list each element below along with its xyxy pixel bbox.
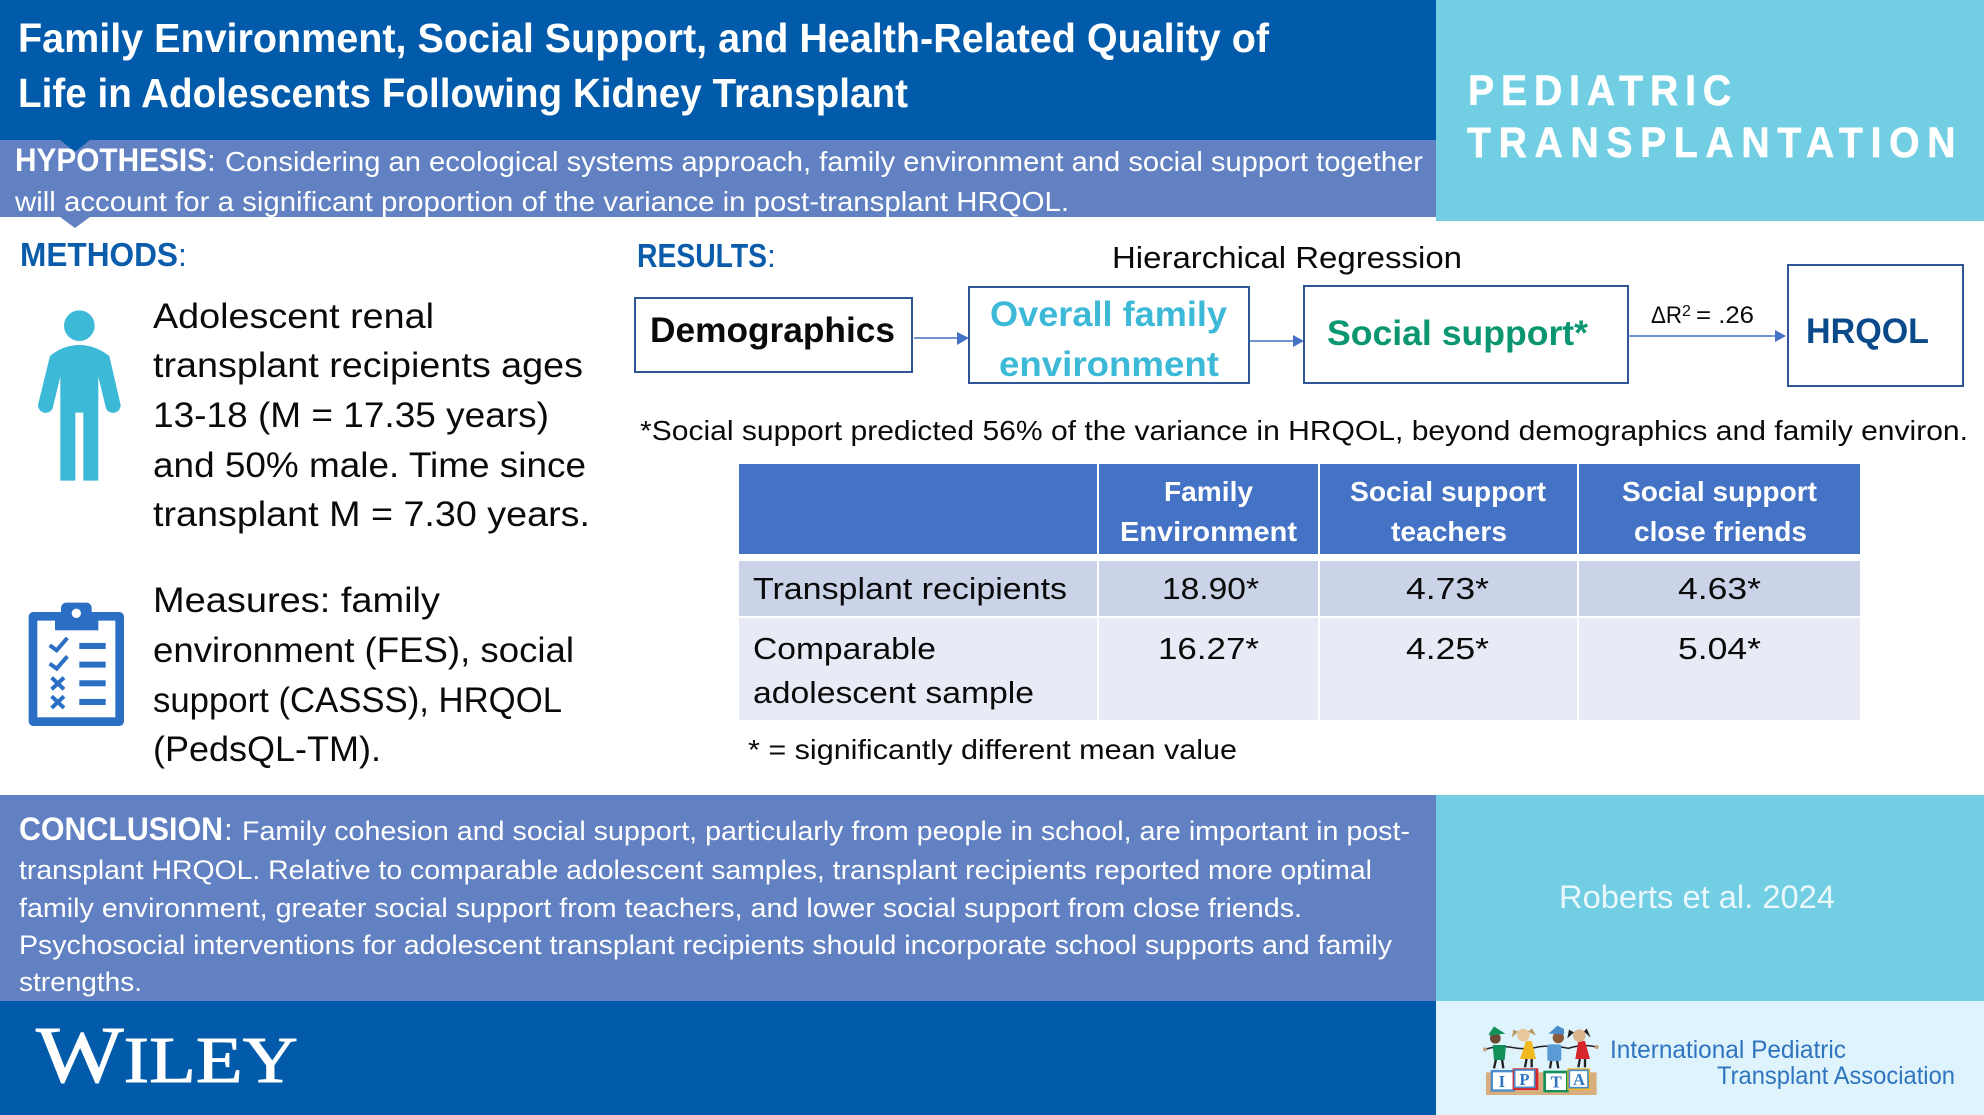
icon: children on alphabet blocks: T [1551, 1073, 1562, 1092]
arrow: social support to HRQOL with delta R squared: = .26 [1696, 302, 1754, 329]
citation panel [1436, 795, 1984, 1001]
methods heading: : [178, 237, 187, 273]
conclusion band: : [224, 812, 233, 847]
box: social support [1304, 286, 1628, 383]
conclusion band: Family cohesion and social support, particularly from people in school, are important in post- [242, 816, 1410, 846]
box: social support: Social support* [1327, 314, 1588, 353]
table row: comparable adolescent sample [753, 631, 1761, 710]
regression diagram heading: Hierarchical Regression [1112, 240, 1462, 275]
publisher footer: Wiley logo: WILEY [36, 1012, 298, 1100]
table header: teachers [1391, 516, 1507, 547]
hypothesis band: will account for a significant proportion of the variance in post-transplant HRQOL. [14, 186, 1069, 217]
hypothesis band: Considering an ecological systems approach, family environment and social support together [225, 146, 1423, 177]
methods: measures text: support (CASSS), HRQOL [153, 681, 562, 720]
journal name panel: TRANSPLANTATION [1467, 118, 1956, 166]
table header: Social support [1622, 476, 1817, 507]
methods: participants text: Adolescent renal [153, 297, 434, 336]
box: HRQOL: HRQOL [1806, 312, 1929, 351]
methods: measures text: environment (FES), social [153, 631, 574, 670]
arrow: family environment to social support [1249, 335, 1304, 347]
title band [0, 0, 1436, 140]
table row: transplant recipients: 4.63* [1678, 571, 1761, 606]
results heading: : [767, 238, 776, 274]
table header: Family [1164, 476, 1253, 507]
methods heading: METHODS [20, 236, 178, 273]
conclusion band: CONCLUSION [19, 811, 223, 847]
table row: transplant recipients [753, 571, 1761, 606]
hypothesis band: : [207, 143, 216, 178]
arrow: demographics to family environment [914, 332, 969, 345]
methods: measures text [153, 581, 574, 769]
icon: children on alphabet blocks: A [1573, 1070, 1585, 1089]
arrow: social support to HRQOL with delta R squared: 2 [1682, 303, 1691, 320]
table row: transplant recipients: 18.90* [1162, 571, 1259, 606]
title band: Life in Adolescents Following Kidney Transplant [18, 70, 908, 116]
arrow: social support to HRQOL with delta R squared [1628, 302, 1786, 342]
table row: comparable adolescent sample: adolescent sample [753, 675, 1034, 710]
table row: comparable adolescent sample: 16.27* [1158, 631, 1259, 666]
conclusion band: transplant HRQOL. Relative to comparable adolescent samples, transplant recipients reported more optimal [19, 855, 1372, 885]
journal name panel [1436, 0, 1984, 221]
box: overall family environment: environment [999, 345, 1219, 384]
results heading: RESULTS [637, 237, 767, 274]
methods: participants text: transplant M = 7.30 years. [153, 495, 590, 534]
icon: children on alphabet blocks: P [1519, 1070, 1530, 1089]
title band: Family Environment, Social Support, and Health-Related Quality of [18, 15, 1269, 61]
arrow: social support to HRQOL with delta R squared: ΔR [1651, 302, 1682, 329]
table row: comparable adolescent sample: 5.04* [1678, 631, 1761, 666]
table row: comparable adolescent sample: 4.25* [1406, 631, 1489, 666]
table header [1120, 476, 1817, 547]
icon: clipboard checklist [29, 603, 124, 726]
table row: transplant recipients: 4.73* [1406, 571, 1489, 606]
IPTA logo footer [1436, 1001, 1984, 1115]
regression note: *Social support predicted 56% of the variance in HRQOL, beyond demographics and family environ. [640, 415, 1968, 446]
organisation name: International Pediatric [1610, 1036, 1846, 1064]
box: overall family environment: Overall family [990, 295, 1228, 334]
table row: transplant recipients: Transplant recipients [753, 571, 1067, 606]
methods: participants text: and 50% male. Time since [153, 446, 586, 485]
table row: comparable adolescent sample: Comparable [753, 631, 936, 666]
methods: measures text: Measures: family [153, 581, 441, 620]
organisation name [1610, 1036, 1955, 1090]
box: demographics: Demographics [650, 311, 895, 350]
organisation name: Transplant Association [1717, 1062, 1955, 1090]
conclusion band: family environment, greater social support from teachers, and lower social support from close friends. [19, 893, 1302, 923]
methods: participants text: 13-18 (M = 17.35 years) [153, 396, 549, 435]
table footnote: * = significantly different mean value [748, 734, 1237, 765]
hypothesis band: HYPOTHESIS [15, 142, 207, 178]
table header: Social support [1350, 476, 1546, 507]
hypothesis band [0, 140, 1436, 228]
box: demographics [635, 298, 912, 372]
icon: person [38, 310, 121, 481]
icon: children on alphabet blocks [1483, 1026, 1599, 1095]
publisher footer: Wiley logo [0, 1001, 1436, 1115]
methods: participants text: transplant recipients ages [153, 346, 583, 385]
conclusion band: strengths. [19, 967, 142, 997]
table header: close friends [1634, 516, 1807, 547]
methods: measures text: (PedsQL-TM). [153, 730, 381, 769]
conclusion band [0, 795, 1436, 1001]
box: HRQOL [1788, 265, 1963, 386]
conclusion band: Psychosocial interventions for adolescent transplant recipients should incorporate school supports and family [19, 930, 1393, 960]
icon: children on alphabet blocks: I [1499, 1072, 1505, 1091]
journal name panel: PEDIATRIC [1468, 66, 1731, 114]
results table [739, 464, 1860, 720]
box: overall family environment [969, 287, 1249, 384]
citation panel: Roberts et al. 2024 [1559, 879, 1835, 915]
table header: Environment [1120, 516, 1297, 547]
methods: participants text [153, 297, 590, 534]
